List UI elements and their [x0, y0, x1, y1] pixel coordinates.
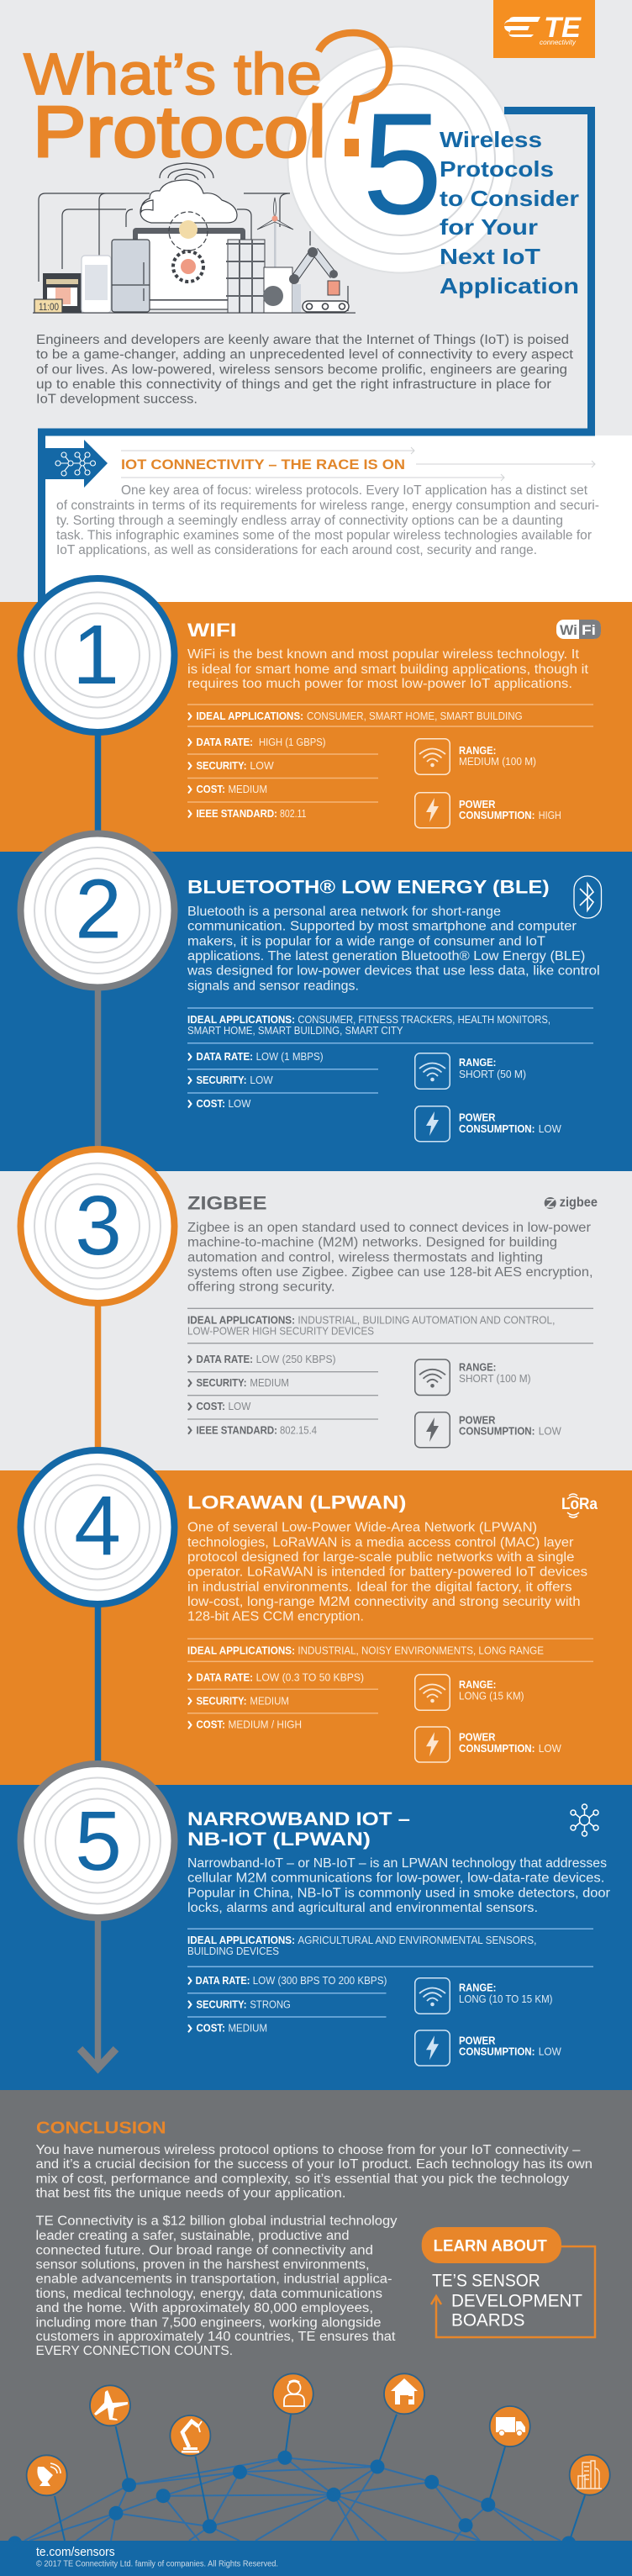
power label: [459, 1112, 561, 1135]
title: What's the Protocol?: Protocol: [33, 92, 326, 172]
icon: robot arm: [170, 2415, 210, 2456]
description: One of several Low-Power Wide-Area Network (LPWAN): [187, 1521, 537, 1535]
specs: LOW: [229, 1098, 250, 1110]
description: [187, 905, 600, 993]
range label: SHORT (100 M): [459, 1373, 531, 1385]
range label: [459, 1982, 553, 2005]
power label: CONSUMPTION:: [459, 1743, 535, 1755]
power label: [459, 1414, 561, 1438]
description: applications. The latest generation Bluetooth® Low Energy (BLE): [187, 949, 585, 963]
description: offering strong security.: [187, 1280, 335, 1295]
description: locks, alarms and agricultural and environmental sensors.: [187, 1901, 538, 1915]
icon: power: [415, 1727, 450, 1762]
description: low-cost, long-range M2M connectivity and strong security with: [187, 1595, 581, 1609]
paragraph: [56, 483, 599, 557]
description: [187, 1856, 610, 1915]
specs: LOW: [250, 1074, 273, 1086]
intro text: IoT development success.: [36, 393, 198, 407]
range label: SHORT (50 M): [459, 1069, 526, 1080]
power label: CONSUMPTION:: [459, 1426, 535, 1438]
specs: LOW: [229, 1401, 250, 1412]
icon: range: [415, 1053, 450, 1089]
range label: LONG (10 TO 15 KM): [459, 1993, 553, 2005]
logo: LoRa: LoRa: [561, 1496, 598, 1513]
callout: learn about sensor boards: BOARDS: [451, 2311, 524, 2331]
big number 5: 5: [362, 83, 443, 245]
specs: 802.11: [280, 808, 307, 820]
range label: RANGE:: [459, 1362, 496, 1374]
heading: BLUETOOTH® LOW ENERGY (BLE): [187, 877, 550, 898]
subtitle: 5 wireless protocols: Wireless: [440, 127, 542, 152]
description: cellular M2M communications for low-power, low-data-rate devices.: [187, 1871, 604, 1886]
logo: Bluetooth: [574, 876, 602, 918]
range label: RANGE:: [459, 1679, 496, 1691]
power label: POWER: [459, 2035, 496, 2046]
paragraph: options: that best fits the unique needs of your application.: [35, 2186, 346, 2200]
illustration: connected devices: 11:00: [39, 301, 59, 313]
specs: SECURITY:: [197, 1377, 247, 1389]
specs: COST:: [197, 2023, 225, 2035]
panel: header: [24, 0, 595, 314]
description: requires too much power for most low-power IoT applications.: [187, 677, 572, 691]
logo: TE Connectivity: [493, 0, 595, 58]
description: systems often use Zigbee. Zigbee can use 128-bit AES encryption,: [187, 1265, 593, 1280]
subtitle: 5 wireless protocols: to Consider: [440, 186, 579, 211]
specs: MEDIUM: [250, 1695, 289, 1707]
specs: STRONG: [250, 1998, 291, 2010]
range label: RANGE:: [459, 1982, 496, 1994]
description: operator. LoRaWAN is intended for battery-powered IoT devices: [187, 1565, 587, 1580]
number 4: [20, 1450, 175, 1604]
description: Zigbee is an open standard used to connect devices in low-power: [187, 1221, 591, 1235]
specs: LOW (1 MBPS): [256, 1051, 324, 1063]
specs: 802.15.4: [280, 1424, 317, 1436]
description: is ideal for smart home and smart building applications, though it: [187, 662, 589, 677]
specs: SECURITY:: [197, 1074, 247, 1086]
description: technologies, LoRaWAN is a media access control (MAC) layer: [187, 1535, 573, 1549]
panel: Zigbee: [0, 1171, 632, 1470]
icon: power: [415, 1106, 450, 1142]
intro text: to be a game-changer, adding an unprecedented level of connectivity to every aspect: [36, 348, 574, 362]
specs: COST:: [197, 1719, 225, 1731]
number 2: 2: [75, 863, 122, 957]
paragraph: TE Connectivity: customers in approximately 140 countries, TE ensures that: [35, 2330, 396, 2344]
description: WiFi is the best known and most popular wireless technology. It: [187, 647, 580, 662]
specs: [187, 1639, 593, 1731]
power label: HIGH: [539, 810, 561, 821]
specs: CONSUMER, SMART HOME, SMART BUILDING: [307, 710, 523, 722]
footer: © 2017 TE Connectivity Ltd. family of companies. All Rights Reserved.: [36, 2559, 278, 2569]
icon: power: [415, 1412, 450, 1448]
power label: LOW: [539, 1426, 561, 1438]
icon: satellite dish: [27, 2455, 67, 2495]
power label: CONSUMPTION:: [459, 810, 535, 821]
specs: IDEAL APPLICATIONS:: [187, 1014, 295, 1026]
heading: CONCLUSION: [36, 2119, 166, 2137]
icon: airplane: [90, 2385, 130, 2426]
logo: TE Connectivity: connectivity: [540, 39, 577, 46]
icon: city buildings: [570, 2455, 610, 2495]
description: Narrowband-IoT – or NB-IoT – is an LPWAN technology that addresses: [187, 1856, 607, 1871]
panel: WiFi: [0, 602, 632, 852]
specs: LOW (250 KBPS): [256, 1354, 336, 1365]
footer: te.com/sensors: [36, 2545, 115, 2559]
range label: [459, 1057, 526, 1080]
paragraph: TE Connectivity: [35, 2214, 398, 2358]
specs: DATA RATE:: [196, 1975, 250, 1987]
connector stems: [80, 731, 116, 2070]
description: 128-bit AES CCM encryption.: [187, 1610, 364, 1624]
description: makers, it is popular for a wide range of consumer and IoT: [187, 934, 546, 948]
paragraph: TE Connectivity: EVERY CONNECTION COUNTS.: [35, 2344, 233, 2358]
power label: [459, 799, 561, 821]
power label: POWER: [459, 799, 496, 810]
icon: house: [384, 2373, 424, 2414]
intro text: [36, 333, 574, 407]
specs: LOW (300 BPS TO 200 KBPS): [253, 1975, 387, 1987]
specs: [187, 1929, 593, 2035]
panel: LoRaWAN: [0, 1470, 632, 1785]
icon: arrow with network: [45, 440, 108, 488]
callout: learn about sensor boards: [422, 2227, 595, 2337]
specs: AGRICULTURAL AND ENVIRONMENTAL SENSORS,: [298, 1935, 536, 1946]
subtitle: 5 wireless protocols: [440, 127, 579, 298]
concentric signal rings: [287, 47, 514, 272]
number 4: 4: [74, 1479, 121, 1573]
intro text: of our lives. As low-powered, wireless sensors become prolific, engineers are gearing: [36, 362, 567, 377]
power label: LOW: [539, 1123, 561, 1135]
logo: WiFi: [556, 620, 601, 639]
specs: [187, 1308, 593, 1436]
callout: learn about sensor boards: TE’S SENSOR: [432, 2271, 540, 2290]
specs: SECURITY:: [197, 1695, 247, 1707]
icon: range: [415, 1675, 450, 1710]
specs: MEDIUM: [229, 2023, 267, 2035]
range label: [459, 1362, 531, 1385]
specs: INDUSTRIAL, BUILDING AUTOMATION AND CONTROL,: [298, 1314, 555, 1326]
number 3: 3: [75, 1179, 122, 1273]
number 2: [20, 834, 175, 987]
speed lines: [121, 447, 595, 481]
logo: Zigbee: zigbee: [560, 1196, 598, 1210]
power label: [459, 2035, 561, 2058]
specs: IEEE STANDARD:: [197, 808, 277, 820]
number 1: [20, 578, 175, 732]
description: Popular in China, NB-IoT is commonly used in smoke detectors, door: [187, 1886, 610, 1900]
title: What's the Protocol?: What’s the: [24, 41, 322, 107]
paragraph: TE Connectivity: leader creating a safer, sustainable, productive and: [35, 2229, 350, 2243]
specs: INDUSTRIAL, NOISY ENVIRONMENTS, LONG RANGE: [298, 1644, 544, 1656]
range label: MEDIUM (100 M): [459, 756, 536, 768]
specs: MEDIUM / HIGH: [229, 1719, 302, 1731]
power label: POWER: [459, 1414, 496, 1426]
callout: learn about sensor boards: DEVELOPMENT: [451, 2291, 582, 2310]
paragraph: TE Connectivity: TE Connectivity is a $12 billion global industrial technology: [35, 2214, 398, 2229]
paragraph: options: and it’s a crucial decision for the success of your IoT product. Each technology has its own: [35, 2157, 592, 2172]
description: was designed for low-power devices that use less data, like control: [187, 964, 600, 979]
paragraph: options: You have numerous wireless protocol options to choose from for your IoT connectivity –: [35, 2143, 581, 2157]
icon: power: [415, 793, 450, 828]
range label: RANGE:: [459, 1057, 496, 1069]
icon: range: [415, 1978, 450, 2014]
number 1: 1: [72, 608, 119, 702]
icon: person: [273, 2373, 313, 2414]
paragraph: TE Connectivity: and the home. With approximately 80,000 employees,: [35, 2301, 373, 2315]
specs: LOW (0.3 TO 50 KBPS): [256, 1671, 364, 1683]
logo: WiFi: Fi: [582, 622, 596, 638]
panel: Narrowband IoT: [0, 1785, 632, 2090]
paragraph: ty. Sorting through a seemingly endless array of connectivity options can be a daunting: [56, 514, 563, 528]
specs: MEDIUM: [229, 784, 267, 795]
paragraph: TE Connectivity: tions, medical technology, energy, data communications: [35, 2287, 382, 2301]
heading: NARROWBAND IOT –: [187, 1808, 410, 1829]
range label: [459, 745, 536, 768]
subtitle: 5 wireless protocols: Next IoT: [440, 244, 540, 269]
intro text: up to enable this connectivity of things and get the right infrastructure in place for: [36, 377, 551, 392]
heading: WIFI: [187, 620, 237, 641]
description: Bluetooth is a personal area network for short-range: [187, 905, 501, 919]
range label: [459, 1679, 524, 1702]
subtitle: 5 wireless protocols: Protocols: [440, 156, 554, 182]
specs: LOW-POWER HIGH SECURITY DEVICES: [187, 1326, 374, 1338]
description: communication. Supported by most smartphone and computer: [187, 920, 577, 934]
description: [187, 1521, 587, 1624]
description: [187, 1221, 593, 1295]
description: in industrial environments. Ideal for the digital factory, it offers: [187, 1580, 572, 1594]
specs: IDEAL APPLICATIONS:: [187, 1644, 295, 1656]
specs: SECURITY:: [197, 760, 247, 772]
specs: DATA RATE:: [197, 1354, 253, 1365]
paragraph: TE Connectivity: sensor solutions, proven in the harshest environments,: [35, 2257, 370, 2272]
power label: LOW: [539, 1743, 561, 1755]
paragraph: options: mix of cost, performance and complexity, so it’s essential that you pick the technology: [35, 2172, 569, 2186]
network diagram: [8, 2373, 610, 2551]
specs: COST:: [197, 1401, 225, 1412]
heading: NB-IOT (LPWAN): [187, 1829, 371, 1850]
specs: MEDIUM: [250, 1377, 289, 1389]
power label: POWER: [459, 1732, 496, 1744]
timeline: numbered circles: [20, 578, 175, 2070]
specs: IDEAL APPLICATIONS:: [187, 1314, 295, 1326]
heading: ZIGBEE: [187, 1192, 267, 1213]
paragraph: options: [35, 2143, 592, 2200]
intro text: Engineers and developers are keenly aware that the Internet of Things (IoT) is poised: [36, 333, 569, 347]
range label: RANGE:: [459, 745, 496, 757]
panel: Bluetooth Low Energy: [0, 852, 632, 1171]
power label: POWER: [459, 1112, 496, 1124]
paragraph: TE Connectivity: including more than 7,500 engineers, working alongside: [35, 2315, 382, 2330]
heading: LORAWAN (LPWAN): [187, 1492, 407, 1513]
range label: LONG (15 KM): [459, 1690, 524, 1702]
description: machine-to-machine (M2M) networks. Designed for building: [187, 1236, 557, 1250]
description: protocol designed for large-scale public networks with a single: [187, 1550, 575, 1565]
number 3: [20, 1149, 175, 1303]
callout: learn about sensor boards: LEARN ABOUT: [434, 2238, 547, 2256]
paragraph: of constraints in terms of its requirements for wireless range, energy consumption and securi-: [56, 499, 599, 513]
paragraph: TE Connectivity: connected future. Our broad range of connectivity and: [35, 2243, 373, 2257]
specs: HIGH (1 GBPS): [259, 736, 326, 748]
description: automation and control, wireless thermostats and lighting: [187, 1250, 543, 1264]
panel: conclusion: [0, 2090, 632, 2551]
specs: DATA RATE:: [197, 1671, 253, 1683]
specs: [187, 1008, 593, 1110]
subtitle: 5 wireless protocols: for Your: [440, 214, 538, 240]
number 5: 5: [75, 1794, 122, 1888]
power label: [459, 1732, 561, 1755]
description: signals and sensor readings.: [187, 979, 359, 993]
heading: IOT CONNECTIVITY – THE RACE IS ON: [121, 457, 405, 472]
specs: IDEAL APPLICATIONS:: [197, 710, 303, 722]
specs: [187, 705, 593, 820]
specs: DATA RATE:: [197, 1051, 253, 1063]
power label: CONSUMPTION:: [459, 1123, 535, 1135]
logo: TE Connectivity: TE: [544, 12, 582, 44]
paragraph: task. This infographic examines some of the most popular wireless technologies available for: [56, 528, 592, 543]
specs: IDEAL APPLICATIONS:: [187, 1935, 295, 1946]
specs: COST:: [197, 1098, 225, 1110]
specs: BUILDING DEVICES: [187, 1945, 279, 1957]
title: What's the Protocol?: [24, 33, 389, 172]
panel: IoT connectivity, the race is on: [42, 111, 632, 605]
icon: delivery truck: [490, 2406, 530, 2447]
power label: LOW: [539, 2046, 561, 2058]
power label: CONSUMPTION:: [459, 2046, 535, 2058]
subtitle: 5 wireless protocols: Application: [440, 273, 579, 298]
footer: [0, 2541, 632, 2576]
logo: WiFi: Wi: [560, 622, 577, 638]
logo: Zigbee: [545, 1196, 598, 1210]
icon: range: [415, 739, 450, 774]
specs: CONSUMER, FITNESS TRACKERS, HEALTH MONITORS,: [298, 1014, 550, 1026]
specs: IEEE STANDARD:: [197, 1424, 277, 1436]
number 5: [20, 1764, 175, 1918]
icon: range: [415, 1359, 450, 1396]
paragraph: TE Connectivity: enable advancements in transportation, industrial applica-: [35, 2272, 392, 2287]
description: [187, 647, 589, 691]
specs: LOW: [250, 760, 274, 772]
specs: COST:: [197, 784, 225, 795]
specs: SMART HOME, SMART BUILDING, SMART CITY: [187, 1025, 403, 1037]
heading: [187, 1808, 410, 1850]
illustration: connected devices: [33, 163, 356, 314]
specs: SECURITY:: [197, 1998, 247, 2010]
icon: network: [571, 1804, 598, 1836]
icon: power: [415, 2030, 450, 2066]
specs: DATA RATE:: [197, 736, 253, 748]
blue frame: [42, 111, 592, 605]
paragraph: IoT applications, as well as considerations for each around cost, security and range.: [56, 543, 537, 557]
paragraph: One key area of focus: wireless protocols. Every IoT application has a distinct set: [121, 483, 588, 498]
